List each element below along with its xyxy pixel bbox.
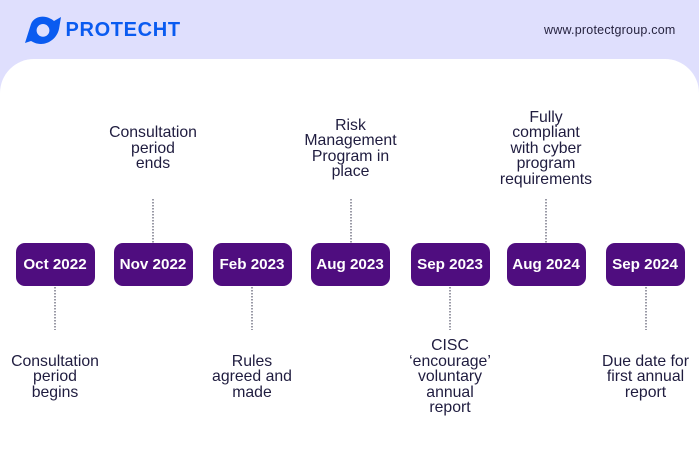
date badge: Nov 2022: Nov 2022	[120, 256, 186, 273]
date badge: Feb 2023	[212, 243, 292, 286]
milestone text: Risk Management Program in place: place	[332, 163, 369, 180]
date badge: Oct 2022	[16, 243, 94, 286]
connector: Aug 2023	[350, 199, 352, 243]
website url: www.protectgroup.com	[544, 23, 676, 37]
milestone text: Consultation period begins: begins	[32, 384, 78, 400]
date badge: Aug 2024: Aug 2024	[512, 256, 580, 273]
header band	[0, 0, 699, 95]
date badge: Aug 2023: Aug 2023	[316, 256, 384, 273]
milestone text: Consultation period ends: Consultation	[109, 124, 197, 141]
milestone text: Risk Management Program in place: Program in	[312, 148, 389, 164]
icon: Protecht logo	[25, 16, 61, 44]
milestone text: Rules agreed and made: Rules	[232, 352, 272, 370]
date badge: Aug 2023	[310, 243, 390, 286]
milestone text: Due date for first annual report	[602, 352, 689, 400]
milestone text: Fully compliant with cyber program requirements: program	[517, 155, 575, 172]
milestone text: Due date for first annual report: Due date for	[602, 352, 689, 370]
milestone text: Consultation period begins: Consultation	[11, 352, 99, 370]
date badge: Oct 2022: Oct 2022	[23, 256, 87, 273]
milestone text: Consultation period ends: ends	[136, 155, 170, 172]
connector: Sep 2023	[449, 287, 451, 330]
milestone text: CISC encourage voluntary annual report	[409, 337, 491, 416]
connector: Sep 2024	[644, 287, 646, 330]
milestone text: Rules agreed and made: made	[232, 384, 272, 400]
connector: Oct 2022	[54, 287, 56, 330]
milestone text: Fully compliant with cyber program requirements: Fully	[529, 108, 563, 126]
milestone text: CISC encourage voluntary annual report: report	[429, 399, 471, 416]
milestone text: Risk Management Program in place: Risk	[335, 116, 366, 134]
milestone text: Rules agreed and made: agreed and	[212, 368, 292, 385]
milestone text: CISC encourage voluntary annual report: CISC	[431, 337, 469, 354]
milestone text: Due date for first annual report: first annual	[607, 368, 684, 385]
connector: Aug 2024	[545, 199, 547, 243]
brand name: PROTECHT	[66, 19, 181, 41]
milestone text: Consultation period begins: period	[33, 368, 77, 385]
date badge: Feb 2023: Feb 2023	[219, 256, 284, 273]
date badge: Sep 2023	[410, 243, 490, 286]
milestone text: CISC encourage voluntary annual report: annual	[426, 384, 474, 400]
milestone text: Risk Management Program in place: Management	[304, 132, 397, 149]
milestone text: Rules agreed and made	[212, 352, 292, 400]
milestone text: Consultation period ends	[109, 124, 197, 172]
date badge: Nov 2022	[114, 243, 192, 286]
milestone text: CISC encourage voluntary annual report: voluntary	[418, 368, 482, 385]
date badge: Sep 2023: Sep 2023	[417, 256, 483, 273]
milestone text: Consultation period ends: period	[131, 140, 175, 156]
connector: Feb 2023	[251, 287, 253, 330]
date badge: Sep 2024	[606, 243, 684, 286]
date badge: Sep 2024: Sep 2024	[612, 256, 678, 273]
milestone text: Fully compliant with cyber program requirements	[500, 108, 592, 188]
milestone text: Risk Management Program in place	[304, 116, 397, 180]
milestone text: Fully compliant with cyber program requirements: compliant	[512, 124, 580, 141]
connector: Nov 2022	[152, 199, 154, 243]
milestone text: Fully compliant with cyber program requirements: with cyber	[510, 140, 582, 156]
milestone text: Fully compliant with cyber program requirements: requirements	[500, 170, 592, 188]
milestone text: Consultation period begins	[11, 352, 99, 400]
milestone text: Due date for first annual report: report	[625, 384, 666, 400]
milestone text: CISC encourage voluntary annual report: ‘encourage’	[409, 352, 491, 370]
date badge: Aug 2024	[506, 243, 586, 286]
